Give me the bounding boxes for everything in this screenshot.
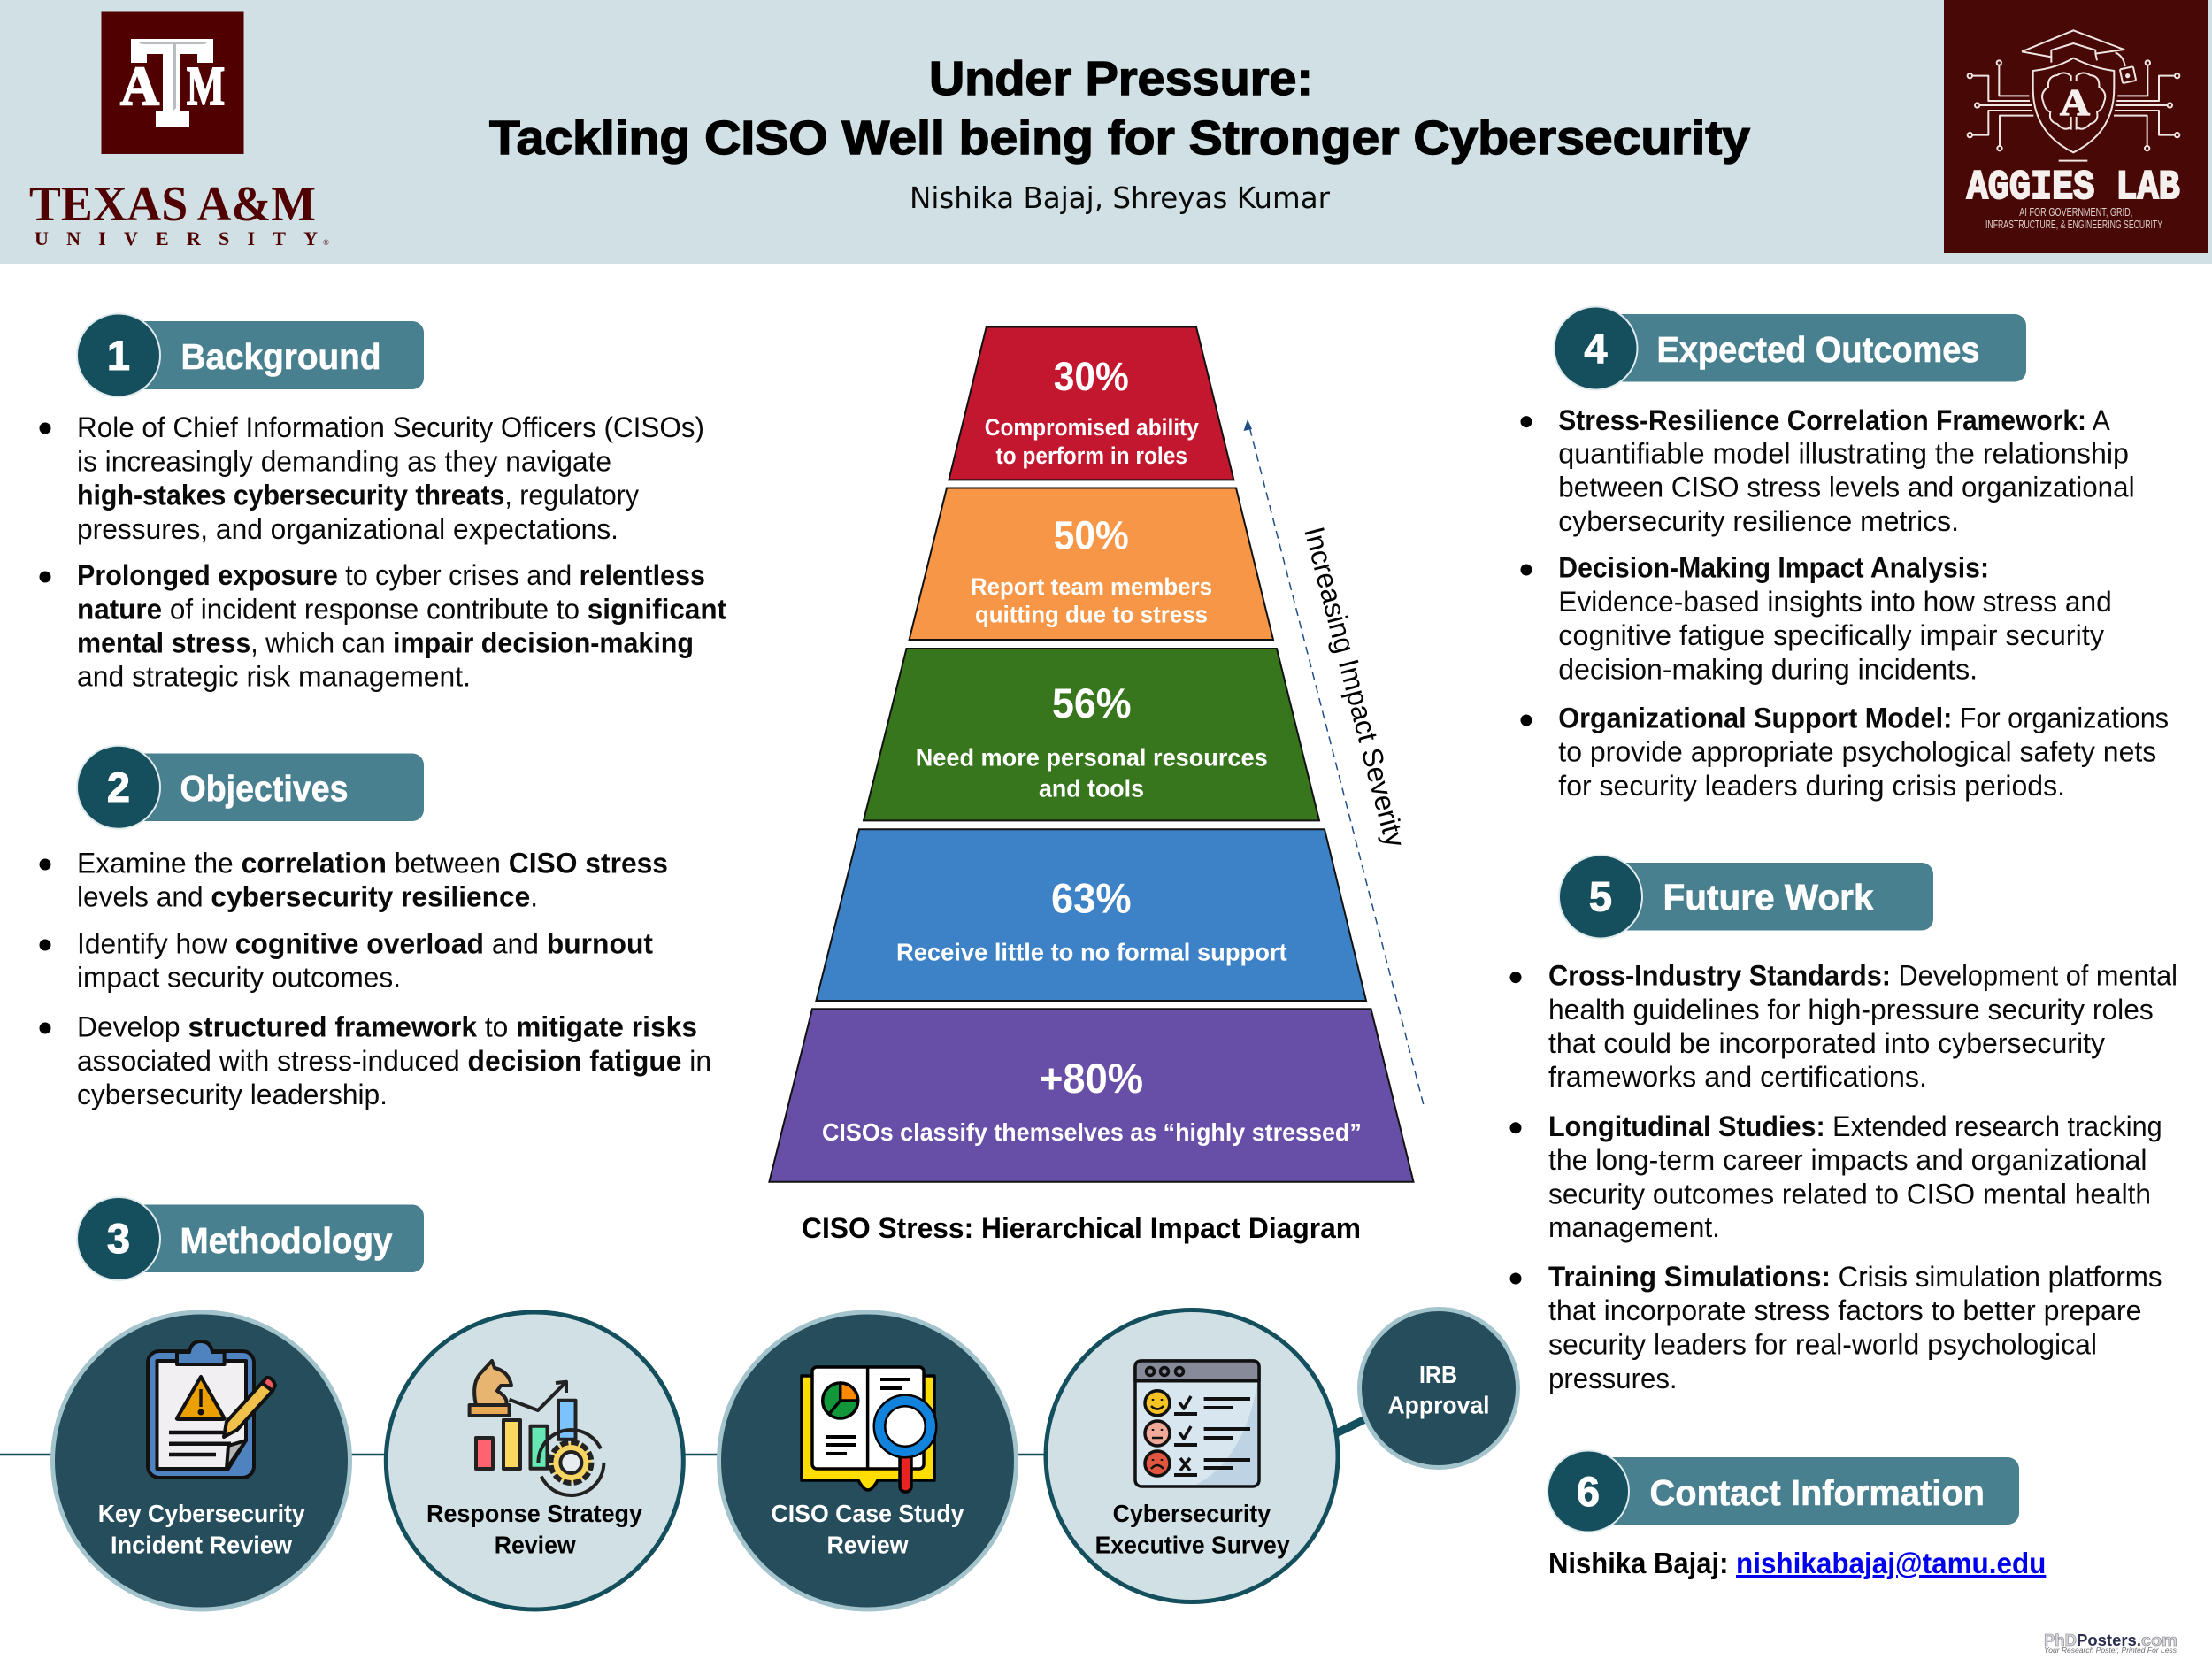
tier 3: 56%: and tools xyxy=(1039,775,1144,802)
header band xyxy=(0,0,2212,264)
logo: PhDPosters xyxy=(2044,1632,2177,1655)
text block: expected outcomes bullets: cognitive fatigue specifically impair security xyxy=(1558,619,2104,651)
text block: background bullets xyxy=(39,411,726,693)
tier 2: 50%: 50% xyxy=(1054,513,1129,558)
step 2: response strategy review xyxy=(386,1312,683,1609)
step 4: cybersecurity executive survey xyxy=(1046,1310,1338,1601)
heading: 5 Future Work: Future Work xyxy=(1663,877,1874,918)
step 3: CISO case study review xyxy=(718,1312,1016,1609)
text block: future work bullets: pressures. xyxy=(1548,1363,1678,1394)
heading: 5 Future Work: 5 xyxy=(1589,872,1612,920)
tier 1: 30%: 30% xyxy=(1054,354,1129,399)
text block: expected outcomes bullets: for security leaders during crisis periods. xyxy=(1558,770,2065,802)
tier 1: 30% xyxy=(949,327,1233,480)
logo: Texas A&M xyxy=(29,11,329,250)
tier 5: +80% xyxy=(769,1009,1414,1182)
pyramid chart: CISO stress hierarchy xyxy=(769,327,1414,1182)
step 1: key cybersecurity incident review: Key Cybersecurity xyxy=(98,1500,305,1527)
authors: Nishika Bajaj, Shreyas Kumar xyxy=(910,180,1330,215)
heading: 1 Background: Background xyxy=(180,336,380,377)
tier 3: 56%: 56% xyxy=(1052,680,1132,726)
step 1: key cybersecurity incident review xyxy=(53,1312,350,1609)
text block: future work bullets: that could be incorporated into cybersecurity xyxy=(1548,1027,2105,1059)
text block: background bullets: Prolonged exposure to cyber crises and relentless xyxy=(77,559,705,591)
heading: 6 Contact Information xyxy=(1548,1451,2019,1532)
step 2: response strategy review: Response Strategy xyxy=(426,1500,643,1527)
text block: expected outcomes bullets: between CISO stress levels and organizational xyxy=(1558,471,2135,503)
heading: 1 Background: 1 xyxy=(107,332,130,379)
text block: background bullets: is increasingly demanding as they navigate xyxy=(77,445,611,477)
text block: objectives bullets: impact security outcomes. xyxy=(77,962,401,994)
text block: background bullets: nature of incident response contribute to significant xyxy=(77,593,726,625)
text block: objectives bullets: Identify how cognitive overload and burnout xyxy=(77,927,653,959)
logo: Aggies Lab: AGGIES LAB xyxy=(1967,165,2180,211)
text block: future work bullets: health guidelines for high-pressure security roles xyxy=(1548,994,2154,1025)
text block: objectives bullets xyxy=(39,848,711,1110)
caption: pyramid: CISO Stress: Hierarchical Impact Diagram xyxy=(802,1212,1361,1244)
heading: 2 Objectives xyxy=(77,746,424,829)
logo: PhDPosters: com xyxy=(2141,1632,2177,1649)
heading: 4 Expected Outcomes: Expected Outcomes xyxy=(1656,329,1980,370)
tier 2: 50%: Report team members xyxy=(971,573,1212,600)
step 3: CISO case study review: Review xyxy=(826,1531,909,1559)
step: IRB approval xyxy=(1359,1310,1518,1467)
tier 4: 63% xyxy=(816,829,1366,1001)
heading: 1 Background xyxy=(77,313,424,396)
text block: contact: nishikabajaj@tamu.edu xyxy=(1736,1547,2046,1579)
tier 2: 50% xyxy=(910,488,1273,640)
text block: background bullets: mental stress, which can impair decision-making xyxy=(77,626,694,658)
text block: expected outcomes bullets: Stress-Resilience Correlation Framework: A xyxy=(1558,404,2110,436)
tier 1: 30%: to perform in roles xyxy=(996,442,1187,469)
step: IRB approval: Approval xyxy=(1387,1392,1490,1419)
heading: 4 Expected Outcomes: 4 xyxy=(1584,325,1608,372)
step 4: cybersecurity executive survey: Executive Survey xyxy=(1095,1531,1290,1559)
tier 4: 63%: Receive little to no formal support xyxy=(896,939,1287,966)
text block: future work bullets: Longitudinal Studies: Extended research tracking xyxy=(1548,1110,2162,1142)
text block: future work bullets: the long-term career impacts and organizational xyxy=(1548,1144,2147,1176)
title xyxy=(489,52,1750,165)
text block: objectives bullets: Develop structured framework to mitigate risks xyxy=(77,1011,697,1043)
tier 4: 63%: 63% xyxy=(1051,875,1132,922)
text block: contact: Nishika Bajaj: xyxy=(1548,1547,1728,1579)
heading: 3 Methodology: Methodology xyxy=(180,1220,393,1261)
step 3: CISO case study review: CISO Case Study xyxy=(772,1500,964,1527)
tier 5: +80%: +80% xyxy=(1040,1055,1143,1102)
text block: expected outcomes bullets: decision-making during incidents. xyxy=(1558,654,1978,686)
logo: Texas A&M: UNIVERSITY xyxy=(35,227,318,250)
tier 5: +80%: CISOs classify themselves as “highly stressed” xyxy=(822,1118,1362,1146)
title: Under Pressure: xyxy=(929,52,1313,105)
logo: Aggies Lab: A xyxy=(2060,83,2091,124)
text block: expected outcomes bullets: quantifiable model illustrating the relationship xyxy=(1558,438,2129,470)
logo: Texas A&M: A xyxy=(120,57,159,117)
text block: expected outcomes bullets: cybersecurity resilience metrics. xyxy=(1558,505,1959,537)
logo: PhDPosters: Your Research Poster, Printed For Less xyxy=(2044,1647,2177,1655)
icon: open book with magnifier xyxy=(802,1367,934,1492)
text block: expected outcomes bullets: Decision-Making Impact Analysis: xyxy=(1558,552,1989,584)
step 1: key cybersecurity incident review: Incident Review xyxy=(111,1531,293,1559)
tier 2: 50%: quitting due to stress xyxy=(975,602,1208,628)
text block: expected outcomes bullets xyxy=(1520,404,2169,802)
tier 1: 30%: Compromised ability xyxy=(985,414,1199,441)
logo: Aggies Lab: AI FOR GOVERNMENT, GRID, xyxy=(2019,206,2132,219)
heading: 4 Expected Outcomes xyxy=(1554,306,2026,389)
text block: future work bullets: management. xyxy=(1548,1211,1720,1243)
arrow: increasing impact severity: Increasing Impact Severity xyxy=(1298,524,1411,850)
heading: 5 Future Work xyxy=(1559,855,1933,938)
text block: future work bullets: Training Simulations: Crisis simulation platforms xyxy=(1548,1261,2162,1293)
logo: PhDPosters: Posters. xyxy=(2077,1632,2141,1649)
title: Tackling CISO Well being for Stronger Cybersecurity xyxy=(489,111,1750,165)
step 2: response strategy review: Review xyxy=(495,1531,576,1559)
logo: Texas A&M: ® xyxy=(323,238,329,247)
text block: future work bullets: frameworks and certifications. xyxy=(1548,1061,1927,1093)
text block: expected outcomes bullets: to provide appropriate psychological safety nets xyxy=(1558,736,2156,768)
logo: Texas A&M: TEXAS A&M xyxy=(29,177,316,232)
logo: Aggies Lab xyxy=(1944,0,2208,253)
text block: future work bullets: security outcomes related to CISO mental health xyxy=(1548,1179,2151,1210)
text block: background bullets: and strategic risk management. xyxy=(77,661,471,693)
text block: future work bullets: that incorporate stress factors to better prepare xyxy=(1548,1294,2141,1326)
logo: PhDPosters: PhD xyxy=(2044,1632,2077,1649)
text block: objectives bullets: cybersecurity leadership. xyxy=(77,1079,388,1110)
text block: future work bullets: security leaders for real-world psychological xyxy=(1548,1329,2097,1361)
text block: expected outcomes bullets: Evidence-based insights into how stress and xyxy=(1558,586,2112,618)
arrow: increasing impact severity xyxy=(1244,419,1424,1104)
step: IRB approval: IRB xyxy=(1419,1361,1457,1388)
text block: objectives bullets: associated with stress-induced decision fatigue in xyxy=(77,1045,711,1077)
tier 3: 56%: Need more personal resources xyxy=(916,744,1268,772)
text block: future work bullets: Cross-Industry Standards: Development of mental xyxy=(1548,959,2177,991)
text block: expected outcomes bullets: Organizational Support Model: For organizations xyxy=(1558,703,2169,734)
tier 3: 56% xyxy=(864,649,1319,820)
icon: survey window with faces xyxy=(1135,1361,1259,1486)
text block: contact xyxy=(1548,1547,2046,1579)
heading: 3 Methodology: 3 xyxy=(107,1215,130,1262)
heading: 2 Objectives: 2 xyxy=(107,764,130,810)
logo: Texas A&M: M xyxy=(187,57,225,117)
heading: 6 Contact Information: 6 xyxy=(1577,1468,1600,1515)
step 4: cybersecurity executive survey: Cybersecurity xyxy=(1113,1500,1271,1527)
text block: background bullets: Role of Chief Information Security Officers (CISOs) xyxy=(77,411,704,443)
icon: clipboard with warning xyxy=(148,1341,275,1478)
text block: background bullets: high-stakes cybersecurity threats, regulatory xyxy=(77,480,639,511)
heading: 3 Methodology xyxy=(77,1197,424,1280)
heading: 6 Contact Information: Contact Information xyxy=(1649,1472,1985,1513)
text block: objectives bullets: Examine the correlation between CISO stress xyxy=(77,848,668,879)
text block: future work bullets xyxy=(1509,959,2177,1394)
text block: background bullets: pressures, and organizational expectations. xyxy=(77,513,618,545)
methodology flow xyxy=(0,1310,1518,1609)
heading: 2 Objectives: Objectives xyxy=(180,768,349,809)
icon: chess knight, bars and gear xyxy=(470,1361,603,1495)
text block: objectives bullets: levels and cybersecurity resilience. xyxy=(77,881,538,913)
